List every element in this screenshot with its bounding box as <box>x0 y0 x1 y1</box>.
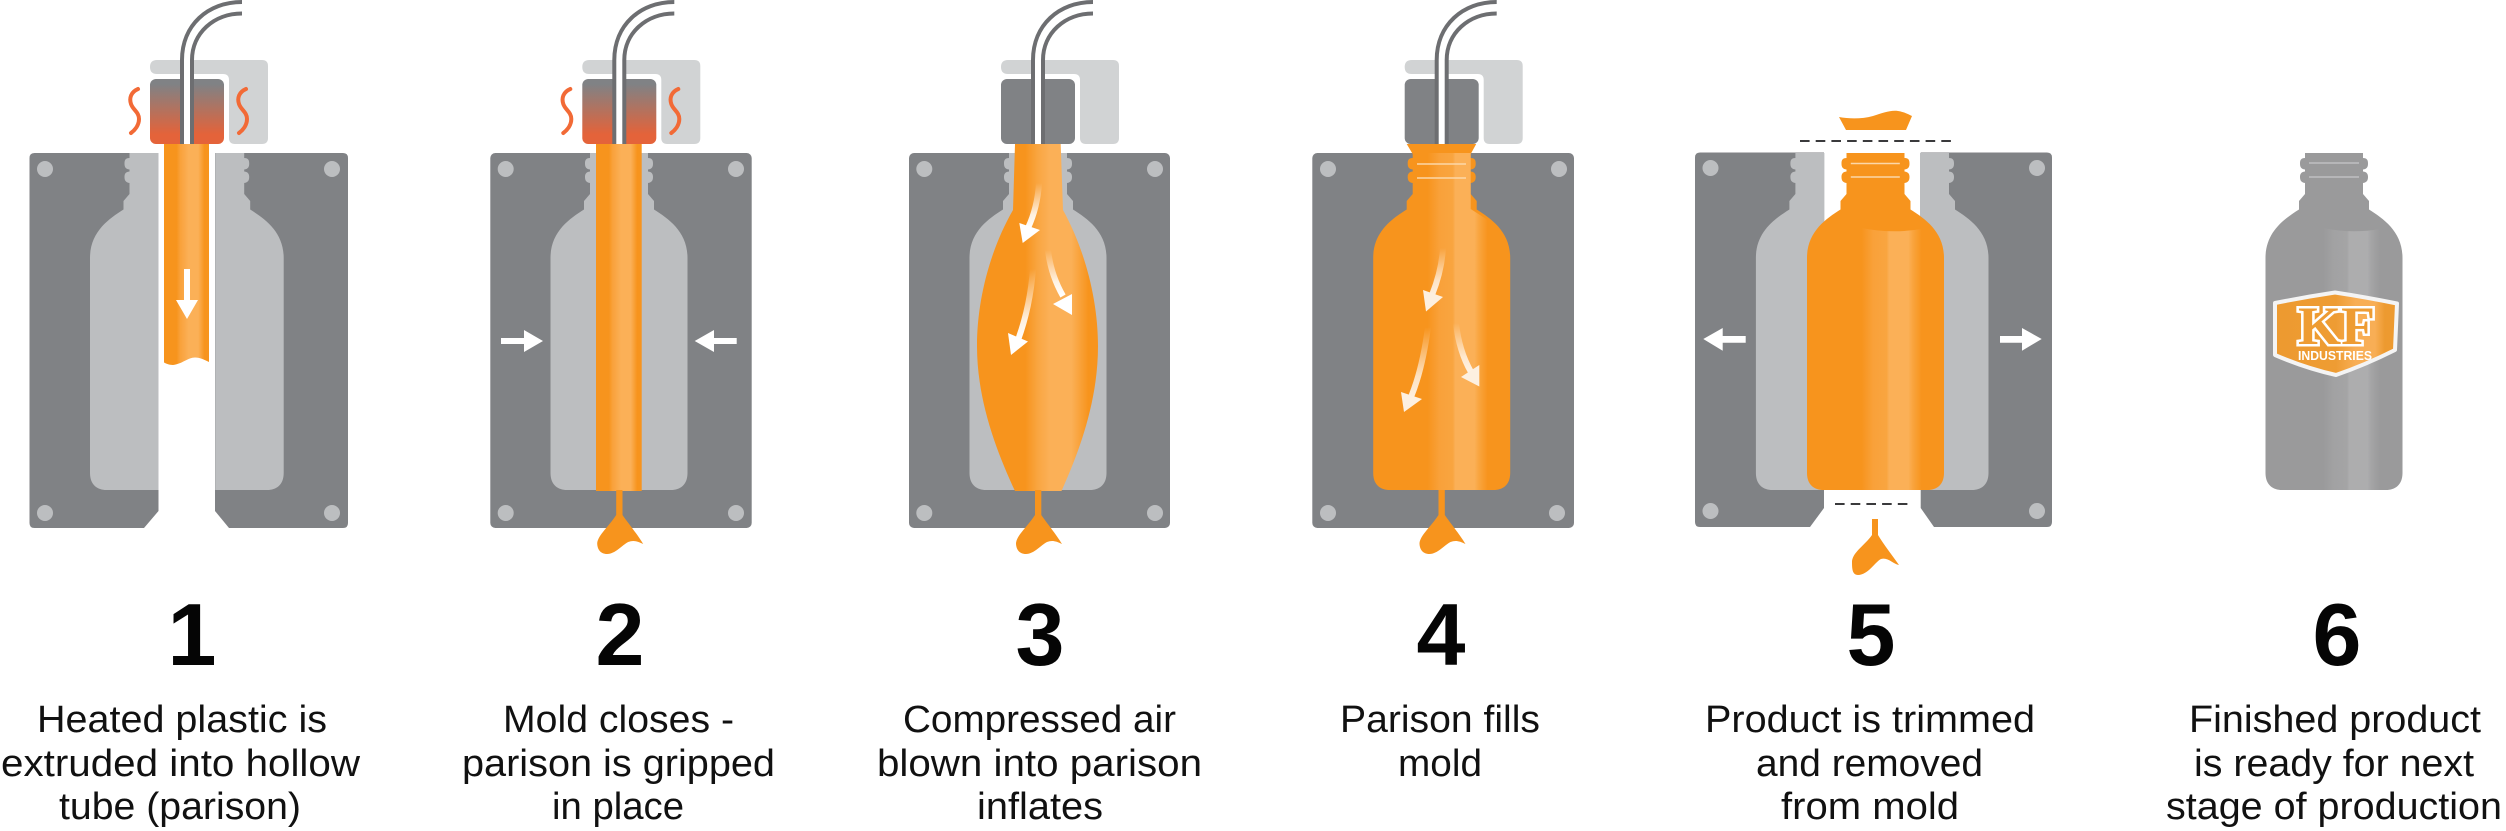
step 3 caption: Compressed air <box>903 699 1176 741</box>
extruder die, heated <box>130 2 268 144</box>
air arrow 3 <box>1008 269 1033 355</box>
pinched parison tail <box>1016 490 1062 554</box>
step 2 caption <box>462 699 775 828</box>
mold bolt holes <box>1702 160 2045 519</box>
step 3 caption: inflates <box>977 786 1103 828</box>
finished orange bottle <box>1807 153 1944 490</box>
right bottle cavity <box>215 153 284 490</box>
step 4 illustration: parison fills mold <box>1312 2 1574 554</box>
step 2 caption: parison is gripped <box>462 743 775 785</box>
step 1 caption <box>1 699 361 828</box>
mold bolt holes <box>37 161 340 521</box>
step 1 illustration: extrusion <box>30 2 348 528</box>
step 4 caption: mold <box>1398 743 1482 785</box>
parison tube <box>164 144 209 365</box>
trimmed bottom piece <box>1852 519 1899 575</box>
step 2 illustration: mold closes <box>490 2 752 554</box>
logo badge: INDUSTRIES <box>2298 349 2372 363</box>
air arrow 2 <box>1048 250 1072 315</box>
step 3 caption: blown into parison <box>877 743 1202 785</box>
parison tube <box>596 144 642 491</box>
pinched parison tail <box>1420 490 1466 554</box>
trimmed top piece <box>1839 111 1912 130</box>
step 2 caption: Mold closes - <box>503 699 734 741</box>
bottle cavity <box>550 153 688 490</box>
extruder die <box>1405 2 1523 144</box>
air arrow 1 <box>1019 183 1040 243</box>
extruder die <box>1001 2 1119 144</box>
mold block <box>909 153 1170 528</box>
right bottle cavity <box>1920 153 1988 490</box>
step 6 number: 6 <box>2313 585 2361 684</box>
air arrow 3 <box>1401 327 1428 412</box>
right mold half <box>215 153 348 528</box>
extruder die, heated <box>563 2 700 144</box>
step 1 caption: extruded into hollow <box>1 743 361 785</box>
mold block <box>490 153 752 528</box>
logo badge: KF <box>2298 296 2375 356</box>
arrow: closing from left <box>501 330 543 352</box>
arrow: opening to left <box>1703 328 1746 351</box>
step 3 number: 3 <box>1016 585 1064 684</box>
step 5 caption: Product is trimmed <box>1705 699 2035 741</box>
step 1 number: 1 <box>168 585 216 684</box>
step 6 caption: is ready for next <box>2194 743 2474 785</box>
right mold half <box>1921 152 2052 527</box>
step 3 caption <box>877 699 1202 828</box>
step 1 caption: Heated plastic is <box>37 699 327 741</box>
air arrow 1 <box>1423 248 1443 312</box>
arrow: closing from right <box>695 330 737 352</box>
step 4 number: 4 <box>1417 585 1466 684</box>
step 6 caption <box>2166 699 2502 828</box>
step 6 illustration: finished bottle <box>2266 153 2402 490</box>
mold bolt holes <box>1320 161 1567 521</box>
trim line bottom <box>1835 503 1908 505</box>
step 4 caption <box>1340 699 1540 785</box>
step 6 caption: Finished product <box>2189 699 2481 741</box>
step 6 caption: stage of production <box>2166 786 2502 828</box>
step 2 number: 2 <box>596 585 644 684</box>
logo badge <box>2275 292 2397 375</box>
gray bottle <box>2266 153 2402 490</box>
mold bolt holes <box>916 161 1163 521</box>
bottle cavity <box>970 153 1106 490</box>
step 4 caption: Parison fills <box>1340 699 1540 741</box>
step 5 caption <box>1705 699 2035 828</box>
orange bottle filling the mold <box>1373 144 1510 490</box>
step 5 illustration: trim and remove <box>1695 111 2052 575</box>
arrow: down <box>176 269 198 319</box>
step 5 caption: from mold <box>1781 786 1959 828</box>
mold block <box>1312 153 1574 528</box>
pinched parison tail <box>597 490 643 554</box>
left mold half <box>30 153 158 528</box>
left bottle cavity <box>1756 153 1824 490</box>
step 2 caption: in place <box>552 786 684 828</box>
step 5 caption: and removed <box>1756 743 1983 785</box>
trim line top <box>1800 140 1951 142</box>
inflating parison <box>977 144 1098 491</box>
arrow: opening to right <box>2000 328 2042 351</box>
step 5 number: 5 <box>1847 585 1895 684</box>
step 1 caption: tube (parison) <box>59 786 301 828</box>
step 3 illustration: air blown in <box>909 2 1170 554</box>
left bottle cavity <box>90 153 158 490</box>
left mold half <box>1695 152 1824 527</box>
air arrow 2 <box>1456 323 1479 386</box>
mold bolt holes <box>498 161 744 521</box>
